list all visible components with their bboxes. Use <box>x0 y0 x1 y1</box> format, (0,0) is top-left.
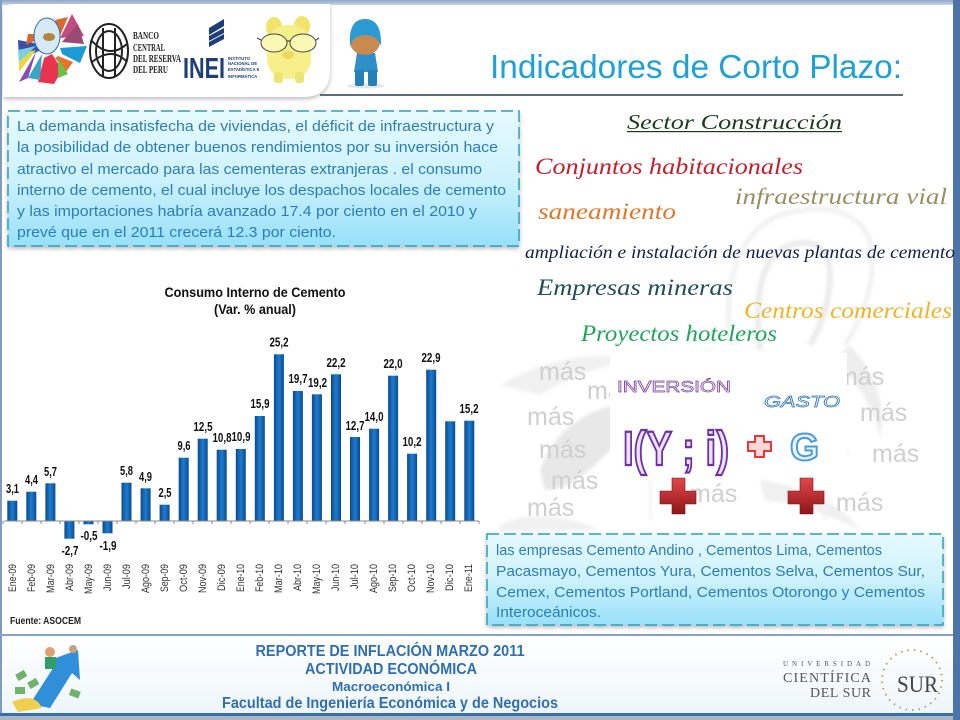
icon: business arrow and money <box>12 645 81 712</box>
value labels: 4,4 <box>25 472 39 487</box>
logo: Universidad Cientifica del Sur: DEL SUR <box>810 686 872 701</box>
month labels: Sep-09 <box>159 564 171 592</box>
value labels: 22,0 <box>384 356 402 371</box>
month labels: May-10 <box>311 564 323 594</box>
value labels: -0,5 <box>80 528 98 543</box>
repeated word: mas: más <box>527 494 574 522</box>
month labels: Nov-10 <box>425 564 437 593</box>
report text: REPORTE DE INFLACIÓN MARZO 2011 <box>256 641 525 660</box>
list of construction sectors: infraestructura vial <box>735 184 947 209</box>
month labels: Sep-10 <box>387 564 399 592</box>
logo: Universidad Cientifica del Sur: SUR <box>897 672 939 697</box>
value labels: -1,9 <box>100 538 116 553</box>
repeated word: mas: más <box>539 358 586 386</box>
repeated word: mas: más <box>872 440 919 468</box>
value labels: -2,7 <box>62 543 78 558</box>
watermark background <box>500 209 882 532</box>
bars <box>7 354 474 539</box>
month labels: Feb-10 <box>254 564 266 592</box>
month labels: Ene-11 <box>463 564 475 592</box>
INEI logo: NACIONAL DE <box>228 61 257 66</box>
month labels: Abr-09 <box>64 564 76 591</box>
icon: red plus left <box>660 478 696 514</box>
report text: ACTIVIDAD ECONÓMICA <box>305 659 477 678</box>
repeated word: mas: más <box>527 403 574 431</box>
value labels: 4,9 <box>139 469 152 484</box>
report text <box>222 641 558 712</box>
text: Banco Central de Reserva: BANCO <box>133 31 159 42</box>
panel: demand text: La demanda insatisfecha de viviendas, el déficit de infraestructura y <box>17 119 495 135</box>
value labels: 12,5 <box>194 419 212 434</box>
month labels: Jun-09 <box>102 564 114 591</box>
panel: demand text: atractivo el mercado para las cementeras extranjeras . el consumo <box>17 162 482 178</box>
repeated word: mas: más <box>837 363 884 391</box>
panel: investment and spending formula <box>610 353 847 476</box>
chart title: (Var. % anual) <box>214 301 296 317</box>
value labels: 2,5 <box>158 485 172 500</box>
value labels: 10,8 <box>212 430 232 445</box>
month labels <box>7 564 475 594</box>
list of construction sectors: saneamiento <box>538 199 676 224</box>
repeated word: mas: más <box>860 399 907 427</box>
month labels: Ago-10 <box>368 564 380 593</box>
panel: demand text: interno de cemento, el cual incluye los despachos locales de cemento <box>17 183 506 199</box>
panel: companies text: Interoceánicos. <box>496 605 601 621</box>
logo: Universidad Cientifica del Sur <box>783 650 942 710</box>
value labels: 12,7 <box>346 418 364 433</box>
report text: Macroeconómica I <box>332 679 450 694</box>
source note: Fuente: ASOCEM <box>10 615 81 627</box>
list of construction sectors: Centros comerciales <box>744 298 952 323</box>
month labels: Ene-09 <box>7 564 19 592</box>
report text: Facultad de Ingeniería Económica y de Negocios <box>222 695 558 712</box>
panel: companies text: Cemex, Cementos Portland, Cementos Otorongo y Cementos <box>496 585 925 601</box>
month labels: Nov-09 <box>197 564 209 593</box>
value labels: 19,2 <box>308 375 327 390</box>
bar chart: cement consumption <box>3 276 483 630</box>
icon: small plus <box>748 436 771 457</box>
repeated word: mas: más <box>587 377 634 405</box>
panel: demand text: prevé que en el 2011 crecerá 12.3 por ciento. <box>17 225 336 241</box>
footer band <box>0 634 960 720</box>
value labels <box>6 334 478 558</box>
icon: Banco Central monogram <box>90 24 128 78</box>
panel: companies text: las empresas Cemento Andino , Cementos Lima, Cementos <box>496 543 882 559</box>
repeated word: mas: más <box>836 489 883 517</box>
panel: investment and spending formula: I(Y ; i) <box>623 423 729 476</box>
value labels: 5,8 <box>120 463 133 478</box>
repeated word: mas <box>527 358 919 522</box>
icon: yellow piggy bank with glasses <box>257 16 319 83</box>
month labels: May-09 <box>83 564 95 594</box>
month labels: Dic-09 <box>216 564 228 591</box>
title: Indicadores de Corto Plazo: <box>490 48 902 85</box>
list of construction sectors: Conjuntos habitacionales <box>535 154 803 179</box>
value labels: 22,2 <box>326 355 346 370</box>
value labels: 10,2 <box>402 434 422 449</box>
value labels: 3,1 <box>6 481 19 496</box>
INEI logo: INSTITUTO <box>228 56 251 61</box>
text: Banco Central de Reserva <box>133 31 182 76</box>
INEI logo <box>183 19 260 85</box>
icon: red plus right <box>788 478 824 514</box>
panel: investment and spending formula: GASTO <box>764 394 840 411</box>
header rule <box>320 94 903 96</box>
month labels: Oct-10 <box>406 564 418 592</box>
text: Banco Central de Reserva: DEL RESERVA <box>133 54 182 65</box>
value labels: 10,9 <box>232 429 250 444</box>
text: Banco Central de Reserva: DEL PERU <box>133 65 168 76</box>
panel: companies text <box>487 534 943 625</box>
icon: colourful globe logo <box>18 14 87 84</box>
panel: demand text <box>8 111 519 246</box>
repeated word: mas: más <box>539 436 586 464</box>
text: Banco Central de Reserva: CENTRAL <box>133 43 165 54</box>
repeated word: mas: más <box>551 467 598 495</box>
INEI logo: INEI <box>183 53 225 85</box>
value labels: 5,7 <box>44 464 57 479</box>
panel: demand text: la posibilidad de obtener buenos rendimientos por su inversión hace <box>17 140 498 156</box>
panel: demand text: y las importaciones habría avanzado 17.4 por ciento en el 2010 y <box>17 204 478 220</box>
icon: Pocoyo character <box>347 19 385 88</box>
list of construction sectors <box>525 154 955 346</box>
month labels: Ago-09 <box>140 564 152 593</box>
chart title <box>164 284 346 317</box>
chart title: Consumo Interno de Cemento <box>164 284 346 300</box>
heading: sector construccion: Sector Construcción <box>627 110 842 134</box>
month labels: Abr-10 <box>292 564 304 591</box>
list of construction sectors: Proyectos hoteleros <box>580 321 777 346</box>
value labels: 15,2 <box>460 401 478 416</box>
logo: Universidad Cientifica del Sur: CIENTÍFICA <box>783 669 872 686</box>
month labels: Jun-10 <box>330 564 342 591</box>
repeated word: mas: más <box>690 480 737 508</box>
panel: investment and spending formula: G <box>790 427 819 469</box>
month labels: Dic-10 <box>444 564 456 591</box>
month labels: Oct-09 <box>178 564 190 592</box>
month labels: Ene-10 <box>235 564 247 592</box>
month labels: Jul-10 <box>349 564 361 589</box>
month labels: Mar-09 <box>45 564 57 593</box>
panel: investment and spending formula: INVERSIÓN <box>617 377 731 396</box>
value labels: 22,9 <box>422 350 440 365</box>
value labels: 9,6 <box>178 438 190 453</box>
list of construction sectors: ampliación e instalación de nuevas plantas de cemento <box>525 242 955 262</box>
month labels: Mar-10 <box>273 564 285 593</box>
value labels: 25,2 <box>270 334 288 350</box>
INEI logo: ESTADÍSTICA E <box>228 67 260 72</box>
axis <box>3 521 479 524</box>
value labels: 14,0 <box>364 409 384 424</box>
logo: Universidad Cientifica del Sur: UNIVERSIDAD <box>783 660 870 668</box>
panel: companies text: Pacasmayo, Cementos Yura, Cementos Selva, Cementos Sur, <box>496 564 925 580</box>
header logos panel <box>3 4 330 97</box>
list of construction sectors: Empresas mineras <box>536 275 733 300</box>
value labels: 15,9 <box>250 396 270 411</box>
month labels: Jul-09 <box>121 564 133 589</box>
INEI logo: INFORMÁTICA <box>228 74 257 79</box>
month labels: Feb-09 <box>26 564 38 592</box>
value labels: 19,7 <box>288 371 308 386</box>
